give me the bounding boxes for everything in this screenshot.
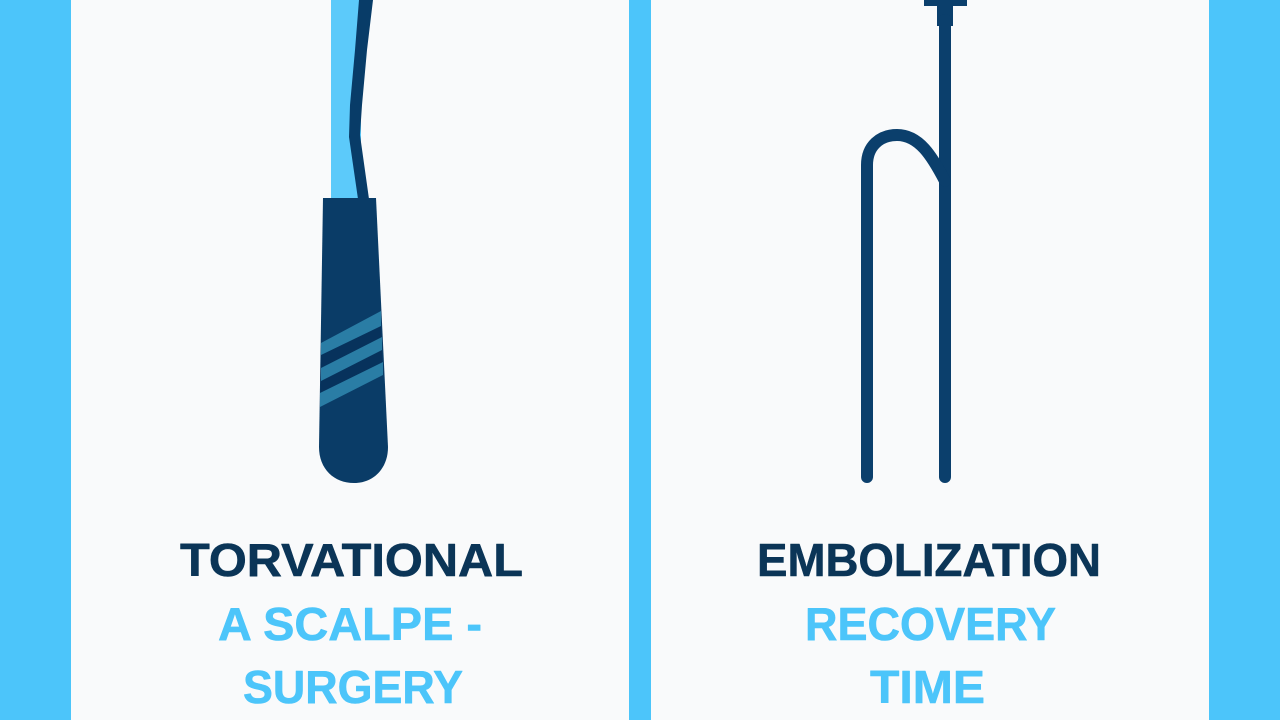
- handle stripes: [320, 311, 383, 407]
- icon: catheter: [867, 0, 967, 477]
- heading: scalpel surgery: [180, 534, 523, 713]
- dark band behind handle stripes: [320, 326, 383, 407]
- scalpel handle: [319, 198, 388, 483]
- icon: scalpel: [319, 0, 388, 483]
- heading: embolization: [757, 534, 1101, 713]
- heading: embolization: EMBOLIZATION: [757, 534, 1101, 586]
- heading: scalpel surgery: A SCALPE -: [218, 598, 482, 650]
- panel: embolization: [651, 0, 1209, 720]
- catheter hub: [924, 0, 967, 26]
- scalpel blade shaft: [331, 0, 361, 200]
- panel: scalpel surgery: [71, 0, 629, 720]
- catheter wire: [939, 20, 951, 477]
- catheter looped wire: [867, 135, 945, 477]
- scalpel wire edge: [349, 0, 373, 199]
- heading: scalpel surgery: SURGERY: [243, 661, 463, 713]
- heading: embolization: RECOVERY: [805, 598, 1056, 650]
- heading: scalpel surgery: TORVATIONAL: [180, 534, 523, 586]
- heading: embolization: TIME: [870, 661, 985, 713]
